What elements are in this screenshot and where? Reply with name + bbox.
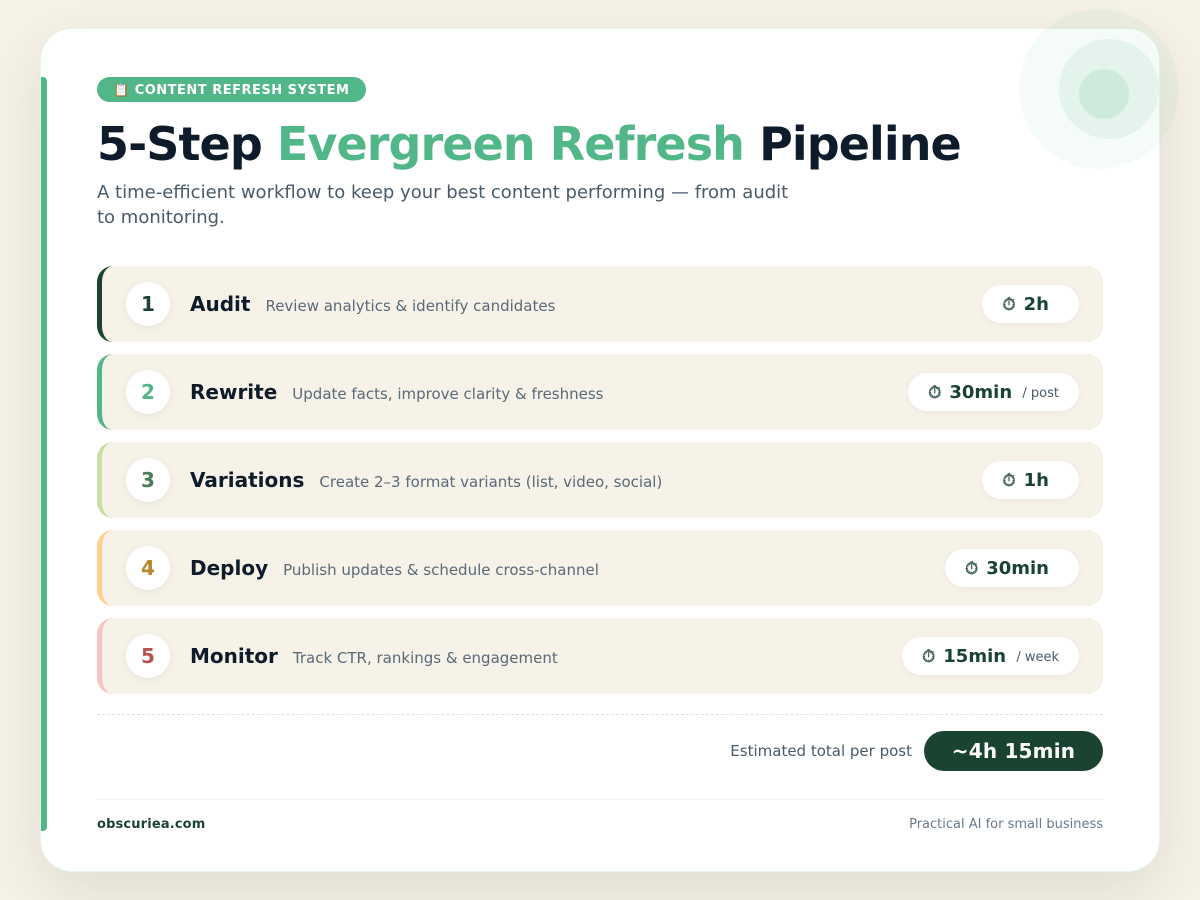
step 1: audit [97,266,1103,342]
step 1: audit: ⏱ 2h [1002,294,1049,315]
step 4: deploy [97,530,1103,606]
step 1: audit: Audit Review analytics & identify candidates [190,292,555,316]
step 2: rewrite: Rewrite Update facts, improve clarity & freshness [190,380,604,404]
step 3: variations: ⏱ 1h [1002,470,1049,491]
step 5: monitor: Monitor Track CTR, rankings & engagement [190,644,558,668]
step 3: variations [97,442,1103,518]
step 4: deploy: ⏱ 30min [965,558,1049,579]
step 2: rewrite: ⏱ 30min / post [928,382,1059,403]
step 2: rewrite [97,354,1103,430]
total pill: ~4h 15min [952,739,1075,763]
subtitle: A time-efficient workflow to keep your best content performing — from audit to monitoring. [97,182,788,228]
badge: 📋 CONTENT REFRESH SYSTEM [113,83,349,98]
step 4: deploy: Deploy Publish updates & schedule cross-channel [190,556,599,580]
dashed divider [97,714,1103,715]
step 3: variations: 3 [141,468,155,492]
footer tagline: Practical AI for small business [909,817,1103,832]
footer divider [97,799,1103,800]
step 3: variations: Variations Create 2–3 format variants (list, video, social) [190,468,662,492]
total pill [924,731,1103,771]
title: 5-Step Evergreen Refresh Pipeline [97,117,961,171]
step 5: monitor: 5 [141,644,155,668]
decorative concentric circles [1019,9,1179,169]
accent bar [41,77,47,831]
badge [97,77,366,102]
total label: Estimated total per post [730,742,912,760]
step 1: audit: 1 [141,292,155,316]
footer brand: obscuriea.com [97,817,205,832]
step 5: monitor [97,618,1103,694]
step 2: rewrite: 2 [141,380,155,404]
step 4: deploy: 4 [141,556,155,580]
step 5: monitor: ⏱ 15min / week [922,646,1059,667]
